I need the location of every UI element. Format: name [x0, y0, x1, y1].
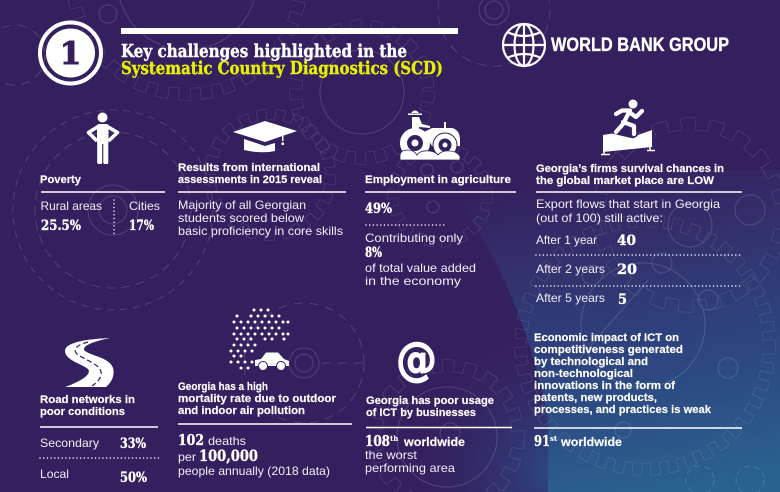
logo: World Bank Group: WORLD BANK GROUP	[551, 34, 729, 56]
panel: assessments: basic proficiency in core skills	[178, 224, 343, 238]
panel: ICT competitiveness: 91	[534, 432, 550, 450]
panel: roads: poor conditions	[40, 406, 125, 418]
panel: ICT competitiveness: st	[550, 434, 558, 443]
icon: car smoke cloud	[230, 308, 290, 370]
panel: ICT usage: performing area	[365, 461, 455, 475]
panel: air pollution: per	[178, 450, 196, 464]
panel: ICT usage: 108	[365, 432, 390, 450]
panel: ICT competitiveness: Economic impact of ICT on	[534, 332, 679, 344]
title: Key challenges highlighted in the	[121, 41, 407, 62]
icon: tractor	[400, 110, 460, 160]
panel: ICT competitiveness: by technological and	[534, 356, 648, 368]
panel: ICT competitiveness: worldwide	[560, 435, 622, 449]
panel: agriculture: 49%	[365, 201, 392, 217]
panel: poverty: 25.5%	[41, 218, 81, 234]
panel: assessments: students scored below	[178, 211, 304, 225]
panel: agriculture: 8%	[365, 245, 382, 261]
panel: roads	[40, 338, 159, 486]
panel: firm survival: After 2 years	[536, 262, 605, 276]
panel: firm survival: 40	[617, 233, 636, 249]
panel: firm survival: Export flows that start in Georgia	[536, 197, 720, 211]
panel: firm survival: 20	[617, 262, 637, 278]
panel: poverty: 17%	[129, 218, 154, 234]
panel: roads: Local	[40, 467, 69, 481]
panel: firm survival: (out of 100) still active:	[536, 211, 663, 225]
panel: assessments	[178, 121, 346, 238]
panel: roads: 33%	[120, 436, 146, 452]
panel: air pollution	[178, 308, 352, 478]
panel: ICT usage: worldwide	[403, 435, 465, 449]
panel: agriculture: of total value added	[365, 261, 476, 275]
title	[121, 28, 458, 79]
panel: air pollution: Georgia has a high	[178, 381, 268, 393]
icon: runner over hurdle	[601, 100, 655, 154]
title: Systematic Country Diagnostics (SCD)	[121, 58, 443, 79]
icon: winding road	[65, 338, 114, 387]
panel: assessments: Results from international	[178, 162, 320, 174]
panel: poverty: Cities	[129, 199, 160, 213]
panel: ICT competitiveness: patents, new products,	[534, 392, 657, 404]
icon: graduation cap	[233, 121, 297, 152]
panel: firm survival	[536, 100, 743, 308]
panel: ICT competitiveness: processes, and practices is weak	[534, 404, 712, 416]
panel: firm survival: the global market place are LOW	[536, 175, 715, 187]
panel: agriculture: Employment in agriculture	[365, 174, 511, 186]
panel: air pollution: deaths	[208, 434, 246, 448]
panel: poverty	[40, 112, 165, 236]
panel: air pollution: 102	[178, 431, 204, 449]
panel: air pollution: people annually (2018 data)	[178, 464, 330, 478]
panel: assessments: Majority of all Georgian	[178, 198, 306, 212]
icon: person	[88, 112, 118, 164]
panel: assessments: assessments in 2015 reveal	[178, 174, 322, 186]
panel: poverty: Rural areas	[40, 199, 102, 213]
icon: at sign: @	[396, 332, 437, 386]
panel: ICT usage: Georgia has poor usage	[366, 395, 494, 407]
panel: ICT competitiveness: non-technological	[534, 368, 633, 380]
panel: roads: Secondary	[40, 436, 99, 450]
panel: ICT usage: of ICT by businesses	[366, 407, 476, 419]
panel: agriculture	[365, 110, 516, 288]
panel: air pollution: mortality rate due to outdoor	[178, 393, 337, 405]
panel: ICT competitiveness: competitiveness generated	[534, 344, 683, 356]
number badge: 1	[60, 36, 81, 72]
panel: ICT usage	[365, 332, 512, 475]
panel: air pollution: and indoor air pollution	[178, 405, 305, 417]
panel: firm survival: Georgia’s firms survival chances in	[536, 163, 724, 175]
number badge	[40, 22, 101, 84]
panel: air pollution: 100,000	[199, 446, 258, 465]
panel: firm survival: After 5 years	[536, 291, 605, 305]
panel: ICT competitiveness	[534, 332, 742, 450]
panel: firm survival: 5	[618, 292, 627, 308]
panel: ICT competitiveness: innovations in the form of	[534, 380, 675, 392]
panel: firm survival: After 1 year	[536, 233, 597, 247]
panel: poverty: Poverty	[40, 174, 82, 186]
panel: roads: Road networks in	[40, 394, 135, 406]
panel: agriculture: Contributing only	[365, 231, 463, 245]
logo: World Bank Group	[503, 24, 729, 66]
panel: ICT usage: the worst	[365, 448, 418, 462]
panel: roads: 50%	[120, 470, 147, 486]
panel: ICT usage: th	[390, 434, 398, 443]
panel: agriculture: in the economy	[365, 274, 461, 288]
